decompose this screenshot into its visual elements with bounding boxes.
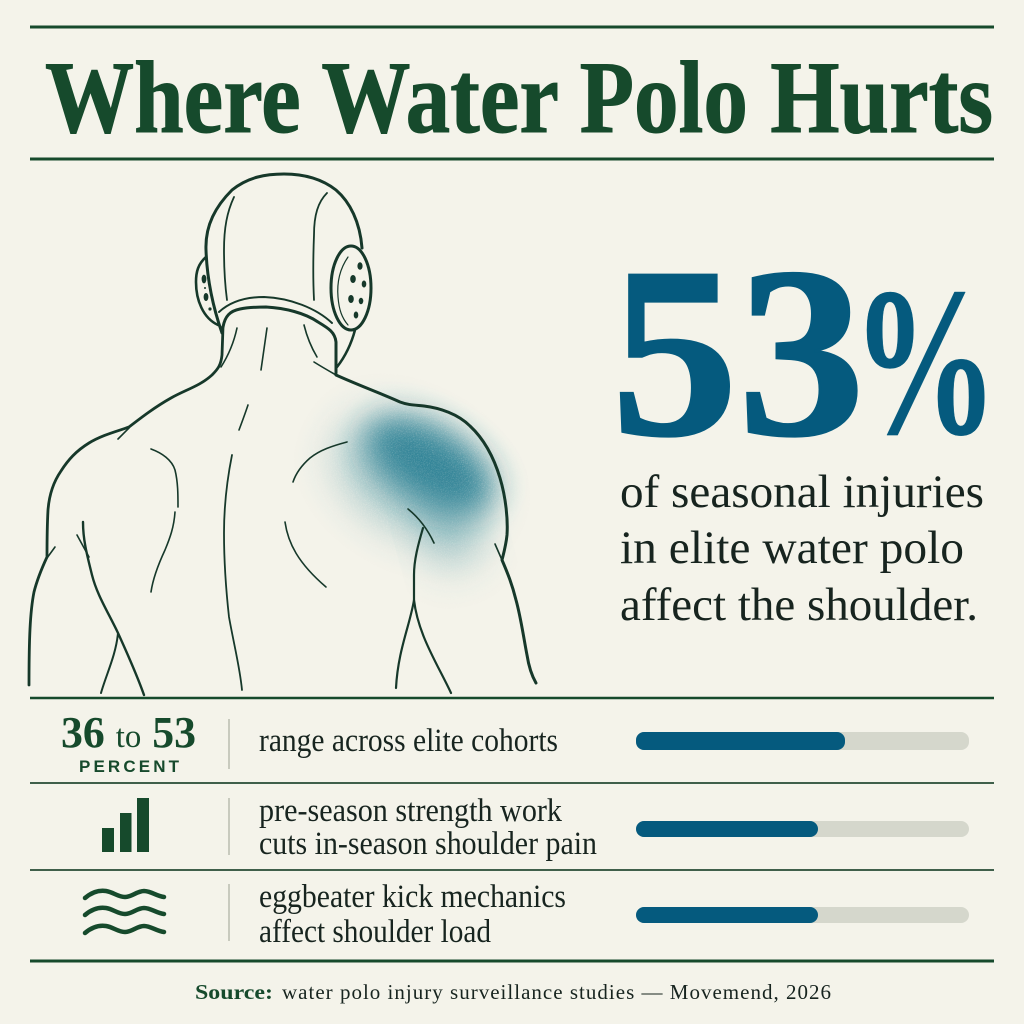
row 3 text: affect shoulder load	[259, 914, 491, 950]
statistic description	[620, 466, 984, 631]
swim cap	[206, 174, 362, 373]
row 1 bar	[636, 732, 969, 750]
right ear guard	[331, 246, 371, 330]
row 1: range across elite cohorts	[61, 708, 969, 776]
back muscle lines	[47, 325, 502, 695]
icon: bar chart	[102, 798, 149, 852]
icon: water waves	[85, 891, 164, 933]
row 2 text: cuts in-season shoulder pain	[259, 826, 597, 862]
left ear guard	[196, 257, 218, 325]
row 2 text	[259, 793, 597, 862]
row 3 text: eggbeater kick mechanics	[259, 879, 566, 915]
range value: 36 to 53	[61, 708, 196, 757]
source line: Source:	[195, 980, 273, 1004]
row 1 text: range across elite cohorts	[259, 723, 558, 759]
big statistic: 53 percent	[611, 217, 998, 487]
big statistic: 53 percent: 53	[611, 217, 865, 487]
row 3 text	[259, 879, 566, 950]
row 3 bar	[636, 907, 969, 923]
shoulder pain highlight	[318, 395, 509, 573]
row 3: eggbeater kick mechanics	[85, 879, 969, 950]
body outline	[29, 327, 536, 685]
percent label: PERCENT	[79, 757, 180, 776]
statistic description: in elite water polo	[620, 522, 964, 574]
row 2 text: pre-season strength work	[259, 793, 562, 829]
illustration: swimmer's back with shoulder highlight	[29, 174, 536, 695]
statistic description: of seasonal injuries	[620, 466, 984, 518]
statistic description: affect the shoulder.	[620, 579, 978, 631]
source line: water polo injury surveillance studies — Movemend, 2026	[282, 980, 831, 1004]
row 2: pre-season strength work	[102, 793, 969, 862]
row 2 bar	[636, 821, 969, 837]
